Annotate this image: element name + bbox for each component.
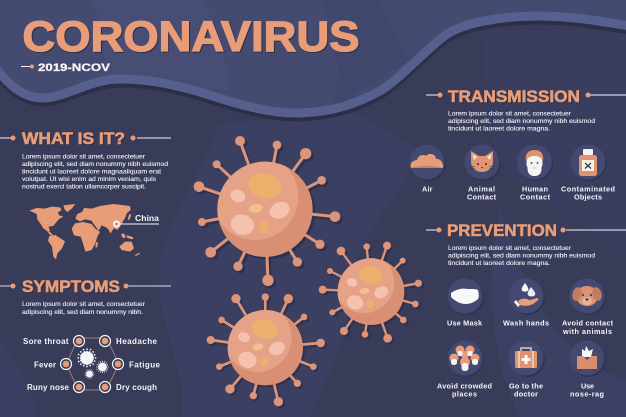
icon: contaminated objects [570,144,607,181]
subtitle [21,62,111,74]
heading: what is it: WHAT IS IT? [22,129,125,148]
heading: symptoms [0,277,171,296]
symptoms diagram: Fever [34,360,56,370]
icon labels: prevention: with animals [562,327,612,336]
icon labels: transmission: Animal [468,184,495,194]
text block: what is it: volutpat. Ut wisi enim ad minim veniam, quis [22,176,156,183]
icon labels: prevention: Go to the [509,382,543,390]
text block: symptoms [22,301,145,316]
icon: use nose-rag [570,340,606,377]
text block: symptoms: adipiscing elit, sed diam nonummy nibh. [22,309,143,316]
icon: cat [464,144,501,181]
icon labels: transmission: Contaminated [561,184,615,194]
text block: prevention [448,245,595,267]
panel: transmission [410,87,626,202]
icon: avoid crowded places [448,340,484,377]
icon: mask [448,278,484,315]
symptoms diagram: Dry cough [116,383,157,392]
subtitle: 2019-NCOV [38,62,111,74]
symptoms diagram [23,336,161,392]
icon: human [517,144,554,181]
text block: transmission: adipiscing elit, sed diam nonummy nibh euismod [448,118,595,125]
text block: symptoms: Lorem ipsum dolor sit amet, consectetuer [22,301,145,308]
text block: what is it: nostrud exerci tation ullamcorper suscipit. [22,184,146,190]
icon labels: transmission: Objects [574,192,602,202]
icon labels: prevention [437,318,614,398]
icon labels: prevention: Use [581,382,594,390]
icon: air [410,144,446,181]
symptoms diagram: Fatigue [129,360,161,370]
heading: prevention: PREVENTION [447,221,557,240]
virus illustrations [194,136,424,408]
heading: transmission: TRANSMISSION [448,87,580,106]
icon labels: prevention: doctor [514,390,538,398]
virus: right [319,242,424,345]
panel: what is it [0,129,171,259]
heading: symptoms: SYMPTOMS [22,277,120,296]
icon: go to the doctor [508,340,545,377]
icon: wash hands [508,278,545,315]
text block: prevention: adipiscing elit, sed diam nonummy nibh euismod [448,252,595,260]
text block: what is it [22,154,168,190]
icon labels: prevention: Avoid crowded [437,382,492,390]
icon labels: transmission: Air [422,184,433,194]
icon labels: prevention: Wash hands [503,318,549,328]
panel: prevention [426,221,626,398]
heading: prevention [426,221,626,240]
heading: what is it [0,129,171,148]
text block: what is it: tincidunt ut laoreet dolore magnaaliquam erat [22,168,161,176]
icon labels: prevention: nose-rag [570,390,604,398]
symptoms diagram: Headache [116,337,158,346]
icon labels: transmission: Contact [520,192,551,202]
icon labels: transmission [422,184,615,202]
symptoms diagram: Sore throat [23,337,69,346]
text block: what is it: adipiscing elit, sed diam nonummy nibh euismod [22,161,168,168]
text block: transmission [448,110,595,132]
symptoms diagram: Runy nose [27,383,70,392]
icon labels: transmission: Contact [467,192,497,202]
text block: prevention: tincidunt ut laoreet dolore magna. [448,260,550,267]
icon labels: prevention: Use Mask [447,318,483,328]
text block: prevention: Lorem ipsum dolor sit amet, consectetuer [448,245,571,252]
panel: symptoms [0,277,171,392]
heading: transmission [426,87,626,106]
map marker: China [113,214,160,228]
text block: transmission: Lorem ipsum dolor sit amet, consectetuer [448,110,571,118]
title: CORONAVIRUS [22,13,360,61]
virus: bottom [207,293,327,408]
text block: what is it: Lorem ipsum dolor sit amet, consectetuer [22,154,145,160]
virus: large [194,136,343,288]
icon labels: prevention: Avoid contact [562,318,614,328]
text block: transmission: tincidunt ut laoreet dolore magna. [448,126,550,132]
icon labels: prevention: places [452,390,477,398]
map marker: China: China [135,214,160,223]
icon: avoid contact with animals [570,278,606,315]
world map [29,204,140,259]
wave band [0,16,626,117]
icon labels: transmission: Human [522,184,548,194]
